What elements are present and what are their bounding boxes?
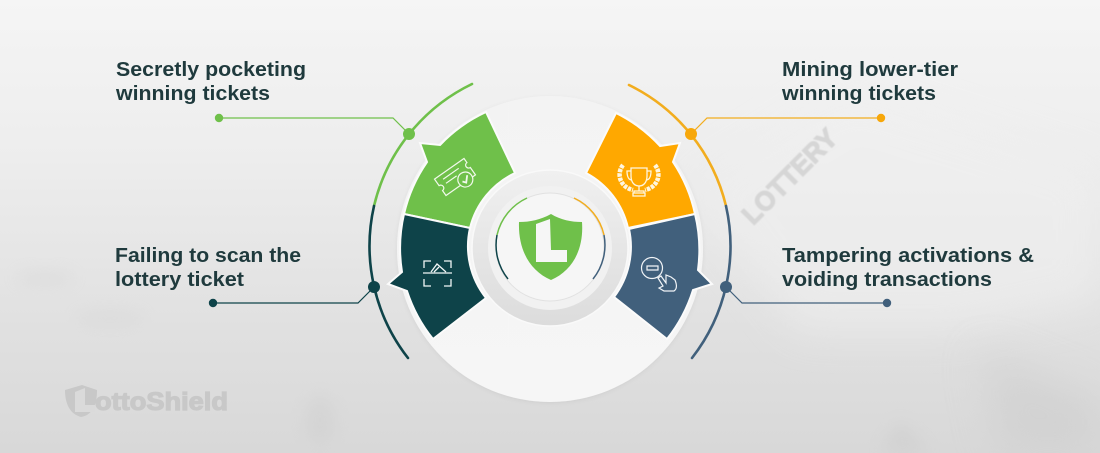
backing circle bbox=[397, 96, 703, 402]
icon: scan frame bbox=[423, 261, 452, 286]
segment: green ticket bbox=[404, 112, 515, 228]
label: secretly pocketing: winning tickets bbox=[115, 83, 270, 105]
icon: ticket bbox=[435, 158, 479, 200]
inner arc: green bbox=[497, 198, 527, 235]
label: mining lower-tier: Mining lower-tier bbox=[782, 59, 958, 81]
icon: trophy with laurels bbox=[620, 165, 658, 196]
watermark: LottoShield logo: ottoShield bbox=[95, 388, 228, 416]
label: failing to scan: lottery ticket bbox=[115, 269, 244, 291]
segment: dark teal scan bbox=[388, 214, 486, 339]
label: tampering activations bbox=[782, 245, 1034, 291]
label: failing to scan bbox=[115, 245, 301, 291]
segment: orange trophy bbox=[586, 113, 695, 228]
segment: slate blue key bbox=[614, 214, 712, 339]
outer arc: green bbox=[374, 84, 472, 206]
label: secretly pocketing bbox=[115, 59, 306, 105]
label: mining lower-tier bbox=[781, 59, 958, 105]
label: tampering activations: Tampering activations & bbox=[782, 245, 1034, 267]
connector: orange bbox=[685, 114, 885, 140]
outer arc: dark teal bbox=[370, 206, 408, 358]
watermark: LOTTERY ticket text: LOTTERY bbox=[736, 123, 844, 230]
label: failing to scan: Failing to scan the bbox=[115, 245, 301, 267]
inner arc: slate bbox=[593, 235, 605, 279]
icon: key and hand bbox=[642, 258, 676, 291]
center ring bbox=[472, 170, 628, 326]
inner arc: orange bbox=[574, 198, 604, 235]
connector: dark teal bbox=[209, 281, 380, 307]
label: tampering activations: voiding transactions bbox=[782, 269, 992, 291]
outer arc: orange bbox=[629, 85, 726, 206]
connector: green bbox=[215, 114, 415, 140]
connector: slate bbox=[720, 281, 891, 307]
label: secretly pocketing: Secretly pocketing bbox=[116, 59, 306, 81]
inner arc: dark teal bbox=[496, 235, 508, 279]
label: mining lower-tier: winning tickets bbox=[781, 83, 936, 105]
outer arc: slate bbox=[692, 206, 730, 358]
icon: shield logo bbox=[519, 214, 582, 280]
watermark: LottoShield logo bbox=[65, 385, 228, 417]
